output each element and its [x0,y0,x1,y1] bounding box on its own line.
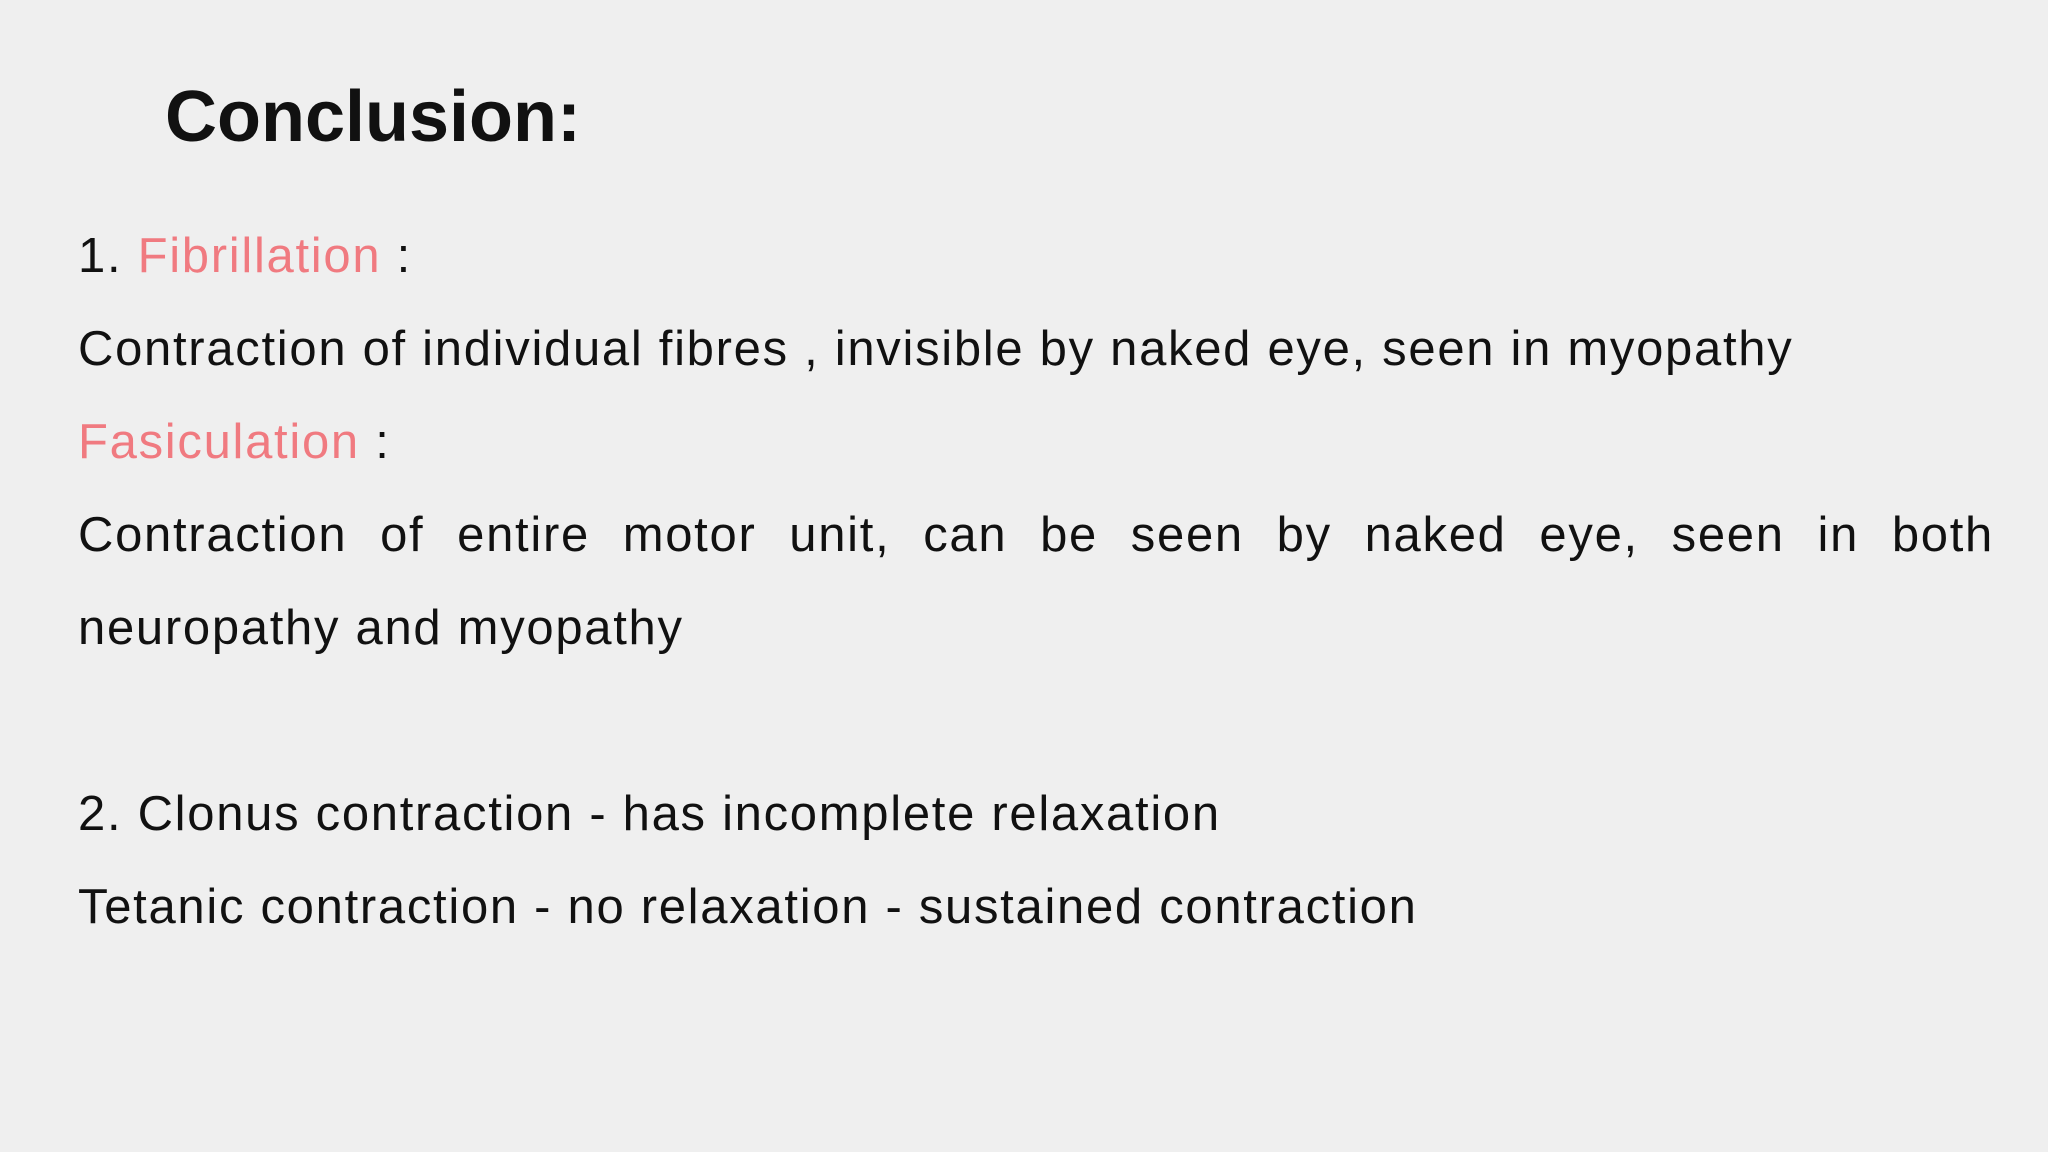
text block: conclusions [78,229,1994,934]
text: fasiculation definition: Contraction of entire motor unit, can be seen by naked eye, seen in both [78,508,1994,562]
text: clonus: 2. Clonus contraction - has incomplete relaxation [78,787,1221,841]
heading: fibrillation: 1. Fibrillation : [78,229,412,283]
title: Conclusion: [165,77,581,157]
text: fasiculation definition: neuropathy and myopathy [78,601,684,655]
text: tetanic: Tetanic contraction - no relaxation - sustained contraction [78,880,1418,934]
heading: fasiculation: Fasiculation : [78,415,391,469]
text: fasiculation definition [78,508,1994,655]
text: fibrillation definition: Contraction of individual fibres , invisible by naked eye, seen in myopathy [78,322,1793,376]
